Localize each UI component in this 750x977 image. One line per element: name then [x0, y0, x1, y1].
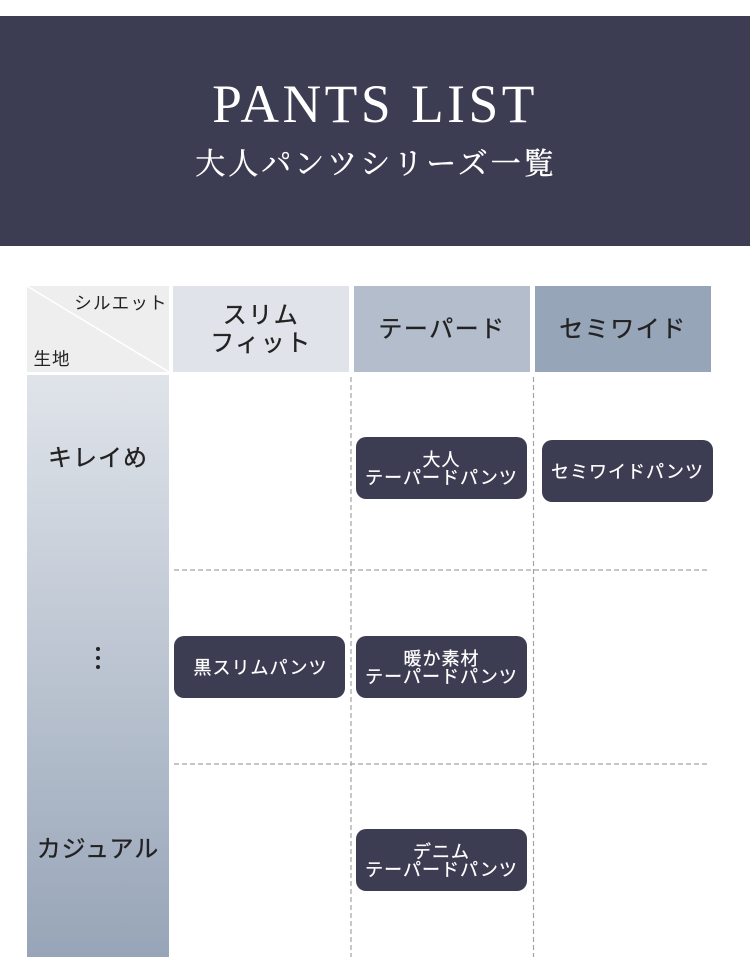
column header: slim fit — [173, 286, 349, 372]
button: adult tapered pants — [356, 437, 527, 499]
column header: tapered — [354, 286, 530, 372]
button: adult tapered pants: 大人 — [422, 450, 460, 470]
button: soft material tapered pants: テーパードパンツ — [365, 667, 518, 687]
button: semi wide pants — [542, 440, 713, 502]
column header: semi wide — [535, 286, 711, 372]
button: soft material tapered pants: 暖か素材 — [403, 649, 479, 669]
axis label: silhouette: シルエット — [74, 292, 168, 312]
button: adult tapered pants: テーパードパンツ — [365, 468, 518, 488]
subtitle: 大人パンツシリーズ一覧 — [195, 148, 557, 181]
title: PANTS LIST — [212, 74, 538, 134]
column header: semi wide: セミワイド — [559, 316, 687, 343]
row label: vertical dots — [96, 647, 100, 669]
button: semi wide pants: セミワイドパンツ — [551, 462, 704, 482]
header banner — [0, 16, 750, 246]
button: denim tapered pants: デニム — [413, 842, 470, 862]
column header: slim fit: スリム — [223, 302, 299, 329]
row header column with gradient — [27, 375, 169, 957]
row label: casual: カジュアル — [37, 836, 159, 862]
button: denim tapered pants: テーパードパンツ — [365, 860, 518, 880]
row label: clean: キレイめ — [48, 444, 148, 472]
button: denim tapered pants — [356, 829, 527, 891]
button: black slim pants — [174, 636, 345, 698]
button: black slim pants: 黒スリムパンツ — [194, 658, 327, 678]
column header: tapered: テーパード — [378, 316, 506, 343]
column header: slim fit: フィット — [210, 330, 312, 357]
axis label: fabric: 生地 — [34, 348, 70, 368]
corner cell: silhouette and fabric axes — [27, 286, 169, 372]
button: soft material tapered pants — [356, 636, 527, 698]
